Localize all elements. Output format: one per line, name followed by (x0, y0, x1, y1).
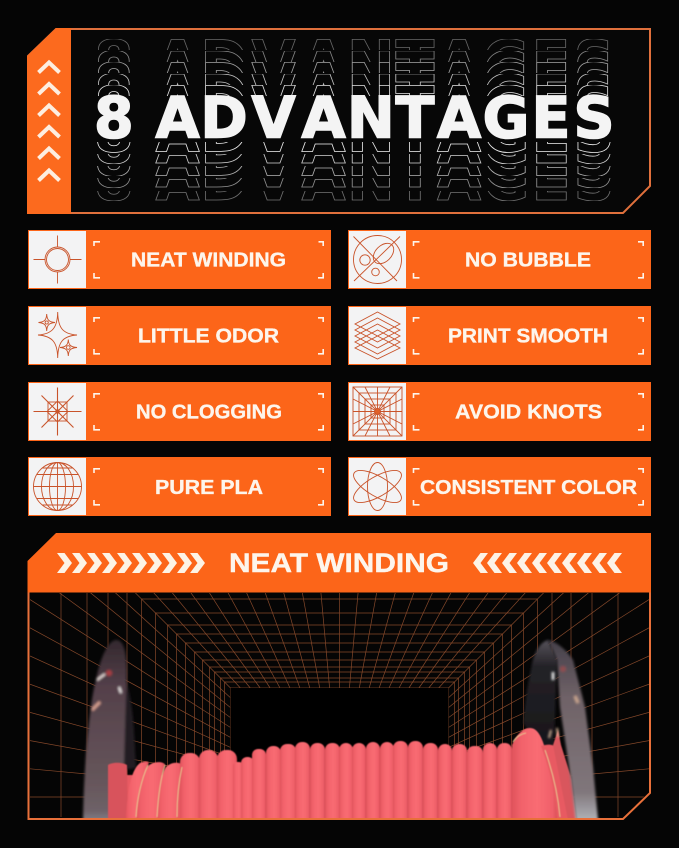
echo text above title: 8 ADVANTAGES (94, 40, 615, 106)
label: LITTLE ODOR (138, 326, 280, 348)
card: avoid knots (348, 382, 651, 441)
echo text above title: 8 ADVANTAGES (94, 52, 615, 118)
panel: neat winding showcase (28, 533, 651, 820)
icon: sparkles (38, 312, 77, 358)
card: no clogging (28, 382, 331, 441)
orange heading bar (28, 533, 651, 592)
tan filament edges (136, 733, 560, 817)
label: PURE PLA (155, 477, 263, 499)
icon: stacked layers (355, 312, 400, 359)
label: NEAT WINDING (131, 250, 286, 272)
label: AVOID KNOTS (455, 402, 602, 424)
card: neat winding (28, 230, 331, 289)
left chevrons (57, 553, 205, 573)
echo text below title: 8 ADVANTAGES (94, 100, 615, 166)
right chevrons (473, 553, 622, 573)
icon: atom orbits (349, 462, 406, 510)
icon: target circle (34, 236, 82, 284)
card: pure pla (28, 457, 331, 516)
icon: clog web (34, 388, 82, 436)
filament coils (107, 727, 577, 818)
filament spool photo (81, 638, 600, 818)
heading: NEAT WINDING (229, 548, 449, 578)
card: little odor (28, 306, 331, 365)
label: PRINT SMOOTH (448, 326, 608, 348)
echo text above title: 8 ADVANTAGES (94, 75, 615, 141)
icon: perspective tunnel (353, 387, 402, 436)
card: consistent color (348, 457, 651, 516)
echo text above title: 8 ADVANTAGES (94, 64, 615, 130)
title: 8 ADVANTAGES (94, 86, 615, 152)
echo text above title: 8 ADVANTAGES (94, 29, 615, 95)
panel: title banner (27, 28, 650, 214)
perspective grid (30, 593, 649, 817)
right flange translucent rim (548, 640, 599, 830)
label: NO CLOGGING (136, 402, 282, 424)
banner outline (28, 29, 650, 213)
card: no bubble (348, 230, 651, 289)
tunnel back wall (230, 688, 448, 819)
card: print smooth (348, 306, 651, 365)
label: CONSISTENT COLOR (420, 477, 638, 499)
icon: globe (34, 462, 82, 510)
echo text below title: 8 ADVANTAGES (94, 135, 615, 201)
orange side tab (27, 28, 71, 214)
left flange (83, 640, 136, 830)
icon: upward chevrons (38, 62, 60, 180)
right flange dark side (523, 640, 557, 746)
icon: crossed bubbles (354, 236, 402, 284)
label: NO BUBBLE (465, 250, 591, 272)
echo text below title: 8 ADVANTAGES (94, 111, 615, 177)
echo text below title: 8 ADVANTAGES (94, 148, 615, 214)
echo text below title: 8 ADVANTAGES (94, 124, 615, 190)
panel outline (28, 592, 650, 819)
filament base (126, 774, 558, 818)
